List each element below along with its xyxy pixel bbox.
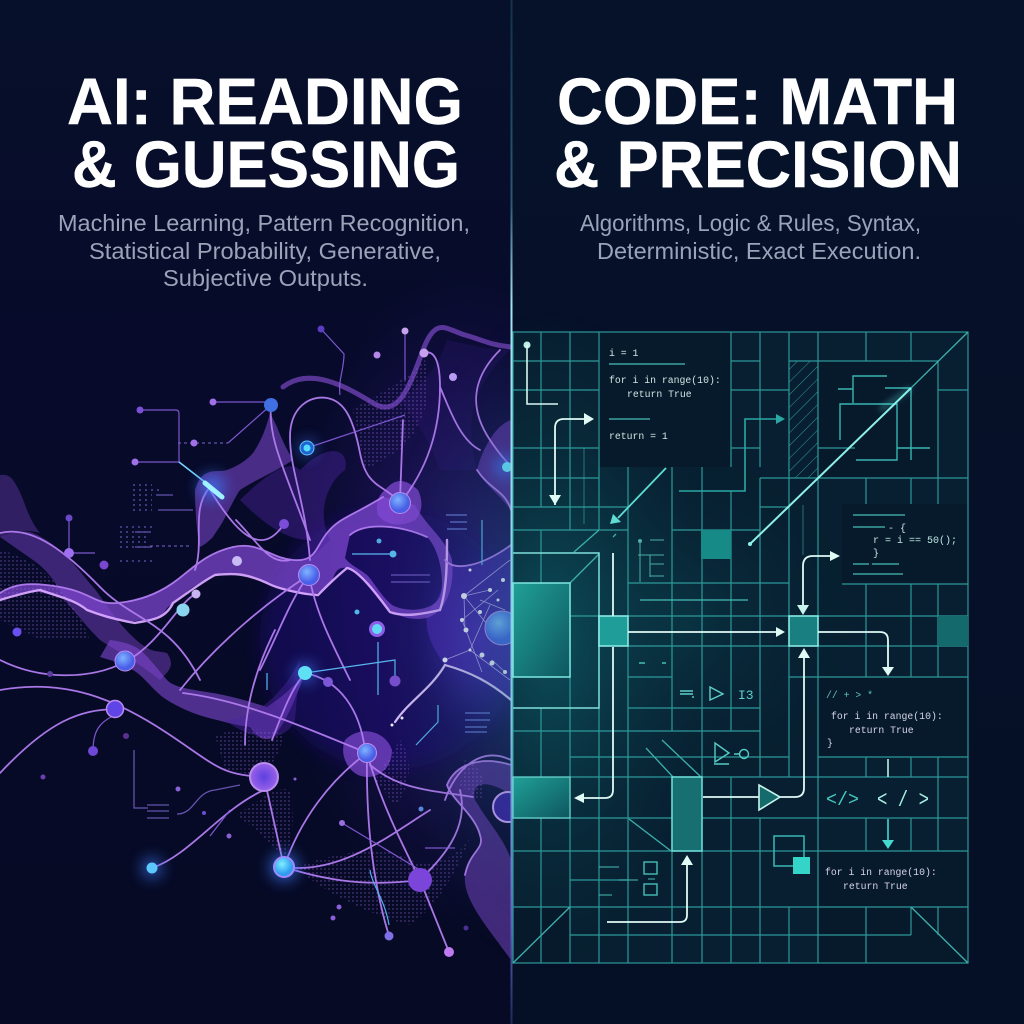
- large neural nodes: [106, 398, 523, 892]
- mesh patches: [0, 360, 484, 925]
- code text: top box: i = 1: [609, 348, 639, 359]
- title: Code: [554, 64, 962, 201]
- glow: deep purple interior: [254, 512, 480, 774]
- arrow: stub to tag row: [887, 759, 889, 777]
- teal block mid: [701, 530, 731, 559]
- code text: middle box: - {: [888, 523, 906, 535]
- code text: top box: for i in range(10):: [609, 375, 721, 386]
- hatched column: [789, 361, 818, 478]
- arrow: long horizontal: [628, 627, 785, 637]
- teal glow centre: [520, 450, 860, 790]
- code text: bottom box: for i in range(10):: [825, 867, 937, 878]
- title: AI: & GUESSING: [72, 127, 460, 201]
- arrow: teal elbow to hatch: [679, 414, 785, 491]
- subtitle: AI: Statistical Probability, Generative,: [89, 238, 441, 264]
- title: AI: [67, 64, 463, 201]
- teal node centre: [789, 616, 818, 646]
- title: Code: CODE: MATH: [557, 64, 958, 138]
- arrow: gate to centre node: [703, 648, 810, 810]
- icon: small circuit: [638, 540, 664, 582]
- code text: middle box: }: [873, 548, 879, 560]
- code text: top box: return = 1: [609, 431, 668, 442]
- panel: code blueprint illustration: [380, 310, 968, 970]
- subtitle: AI: Subjective Outputs.: [163, 265, 368, 291]
- subtitle: Code: Deterministic, Exact Execution.: [597, 238, 921, 264]
- subtitle: AI: [58, 210, 470, 291]
- arrow: right then down: [818, 632, 894, 676]
- teal block lower left: [513, 777, 570, 818]
- panel: neural network illustration: [0, 270, 660, 960]
- teal tall block: [672, 777, 702, 851]
- glow: central purple haze: [324, 316, 510, 885]
- panel: left background: [0, 0, 512, 1024]
- rule lines: [584, 364, 905, 663]
- code text: top box: [609, 348, 721, 442]
- arrow: long diagonal: [748, 388, 911, 546]
- node glows: [143, 441, 515, 880]
- panel: right background: [512, 0, 1024, 1024]
- offset block frame: [513, 553, 599, 708]
- dark purple wash shapes: [225, 340, 510, 737]
- icon: triple glyph row: [680, 687, 723, 700]
- small cyan nodes: [146, 441, 512, 874]
- dark code box fills: [513, 332, 968, 963]
- arrow: L connector: [524, 342, 558, 404]
- central mesh burst lines: [445, 560, 510, 680]
- teal block right: [938, 616, 968, 646]
- arrow: tags down to code: [882, 819, 894, 849]
- code text: function box: for i in range(10):: [831, 711, 943, 722]
- neural ribbons translucent fills: [0, 413, 511, 960]
- code text: function box: [826, 690, 943, 749]
- icon: stacked squares: [599, 862, 657, 895]
- glowing streak: [205, 483, 222, 497]
- tag glyph large: < / >: [877, 788, 929, 813]
- outlined square with filled corner: [774, 836, 810, 874]
- code text: middle box: [873, 523, 957, 560]
- tag glyph small: </>: [826, 789, 859, 811]
- subtitle: Code: Algorithms, Logic & Rules, Syntax,: [580, 210, 921, 236]
- teal filled block large: [513, 583, 570, 677]
- arrow: left node down and back: [574, 553, 613, 803]
- small lilac and purple nodes: [12, 326, 468, 957]
- code text: bottom box: return True: [843, 881, 908, 892]
- diagonal accent lines: [513, 332, 968, 963]
- central mesh burst nodes: [390, 568, 507, 726]
- subtitle: AI: Machine Learning, Pattern Recognition,: [58, 210, 470, 236]
- icon: schematic top right: [838, 376, 930, 460]
- dashed micro data labels: [120, 443, 490, 818]
- burst membrane: [427, 545, 511, 700]
- arrow: to code box and down: [549, 413, 594, 505]
- title: Code: & PRECISION: [554, 127, 962, 201]
- icon: logic gate: [714, 743, 748, 764]
- glow: burst behind mesh: [426, 591, 510, 718]
- code text: function box: }: [827, 738, 833, 749]
- arrow: diagonal from code box: [610, 468, 666, 524]
- teal node left: [599, 616, 628, 646]
- neural ribbon highlights: [0, 328, 511, 952]
- blueprint grid: [513, 332, 968, 963]
- glyph label: I3: [738, 688, 754, 703]
- teal glow left: [380, 310, 720, 970]
- cyan data traces: [179, 462, 482, 925]
- arrow: bottom elbow up: [607, 855, 693, 922]
- grid tint: [513, 332, 968, 963]
- arrow: up-right to code box: [797, 551, 840, 615]
- code text: top box: return True: [627, 389, 692, 400]
- code text: middle box: r = i == 50();: [873, 535, 957, 547]
- thin connector lines: [69, 329, 455, 870]
- code text: function box: // + > *: [826, 690, 873, 701]
- title: AI: AI: READING: [67, 64, 463, 138]
- subtitle: Code: [580, 210, 921, 264]
- code text: bottom box: [825, 867, 937, 892]
- code text: function box: return True: [849, 725, 914, 736]
- divider: [510, 0, 512, 1024]
